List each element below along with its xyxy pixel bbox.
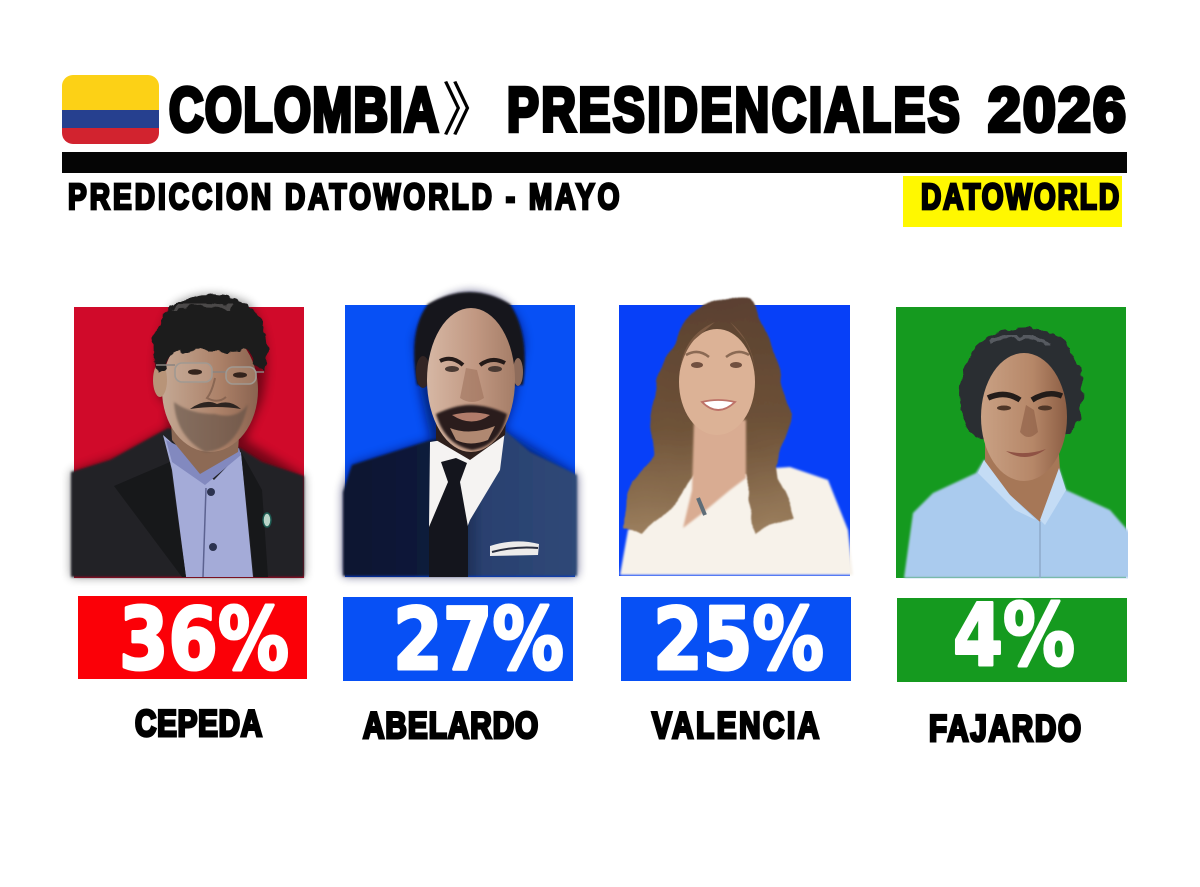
percentage bar: Cepeda xyxy=(78,596,307,679)
title: PRESIDENCIALES xyxy=(507,75,960,144)
icon: Colombia flag xyxy=(62,75,159,144)
name: Valencia: VALENCIA xyxy=(652,706,819,747)
panel: Fajardo xyxy=(896,307,1130,750)
title: 2026 xyxy=(988,75,1126,144)
title: 》 xyxy=(442,63,500,147)
value: 4%: 4% xyxy=(953,586,1075,686)
percentage bar: Abelardo xyxy=(343,597,573,681)
name: Fajardo: FAJARDO xyxy=(929,709,1081,750)
value: 25%: 25% xyxy=(653,590,824,690)
portrait: Valencia xyxy=(620,298,853,575)
portrait background: Cepeda xyxy=(74,307,304,578)
name: Cepeda: CEPEDA xyxy=(135,704,262,745)
title xyxy=(169,63,1126,147)
panel: Abelardo xyxy=(343,292,577,747)
name: Abelardo: ABELARDO xyxy=(363,706,538,747)
portrait background: Valencia xyxy=(619,305,850,576)
panel: Valencia xyxy=(619,298,853,747)
portrait: Cepeda xyxy=(71,295,304,577)
header rule xyxy=(62,152,1127,173)
portrait: Fajardo xyxy=(904,327,1130,578)
portrait background: Fajardo xyxy=(896,307,1126,578)
title: COLOMBIA xyxy=(169,75,438,144)
percentage bar: Valencia xyxy=(621,597,851,681)
portrait: Abelardo xyxy=(343,292,577,577)
subtitle: PREDICCION DATOWORLD - MAYO xyxy=(68,177,619,217)
value: 27%: 27% xyxy=(393,590,564,690)
value: 36%: 36% xyxy=(119,590,289,690)
percentage bar: Fajardo xyxy=(897,598,1127,682)
panel: Cepeda xyxy=(71,295,307,745)
brand tag: DATOWORLD: DATOWORLD xyxy=(921,177,1119,217)
portrait background: Abelardo xyxy=(345,305,575,577)
